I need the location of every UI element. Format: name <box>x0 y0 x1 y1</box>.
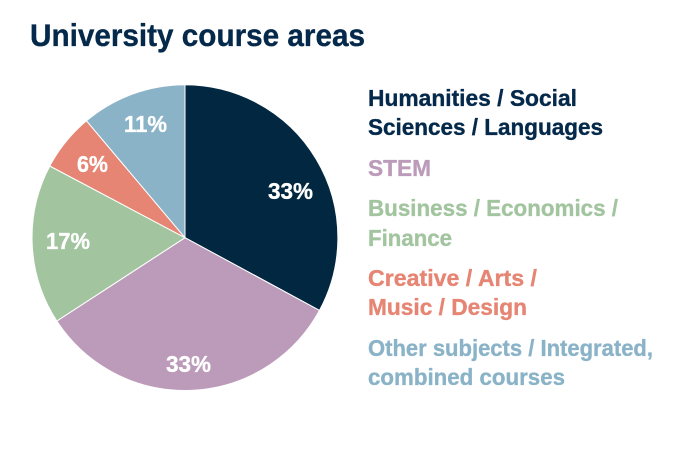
slice: Other 11% <box>86 85 185 238</box>
legend item: Creative: Music / Design <box>368 294 527 320</box>
legend item: Creative <box>368 265 538 320</box>
slice: Business 17% <box>32 166 185 321</box>
legend item: Other: combined courses <box>368 364 565 390</box>
legend item: Humanities <box>368 85 603 140</box>
title: University course areas <box>30 17 365 53</box>
value label: 17%: 17% <box>46 228 90 254</box>
legend item: STEM: STEM <box>368 155 431 181</box>
legend item: Creative: Creative / Arts / <box>368 265 538 291</box>
pie chart <box>32 85 338 390</box>
value label: 33% humanities: 33% <box>268 178 313 204</box>
slice: Humanities 33% <box>185 85 338 310</box>
value label: 11%: 11% <box>124 111 167 137</box>
legend item: Business: Business / Economics / <box>368 195 619 221</box>
slice: Creative 6% <box>50 121 185 238</box>
legend item: Humanities: Sciences / Languages <box>368 114 603 140</box>
legend item: Other <box>368 335 653 390</box>
slice: STEM 33% <box>57 238 320 390</box>
legend <box>368 85 653 390</box>
legend item: Business <box>368 195 619 251</box>
legend item: Humanities: Humanities / Social <box>368 85 577 111</box>
legend item: Other: Other subjects / Integrated, <box>368 335 653 361</box>
value label: 6%: 6% <box>77 151 108 177</box>
value label: 33% STEM: 33% <box>166 351 211 377</box>
legend item: Business: Finance <box>368 225 452 251</box>
